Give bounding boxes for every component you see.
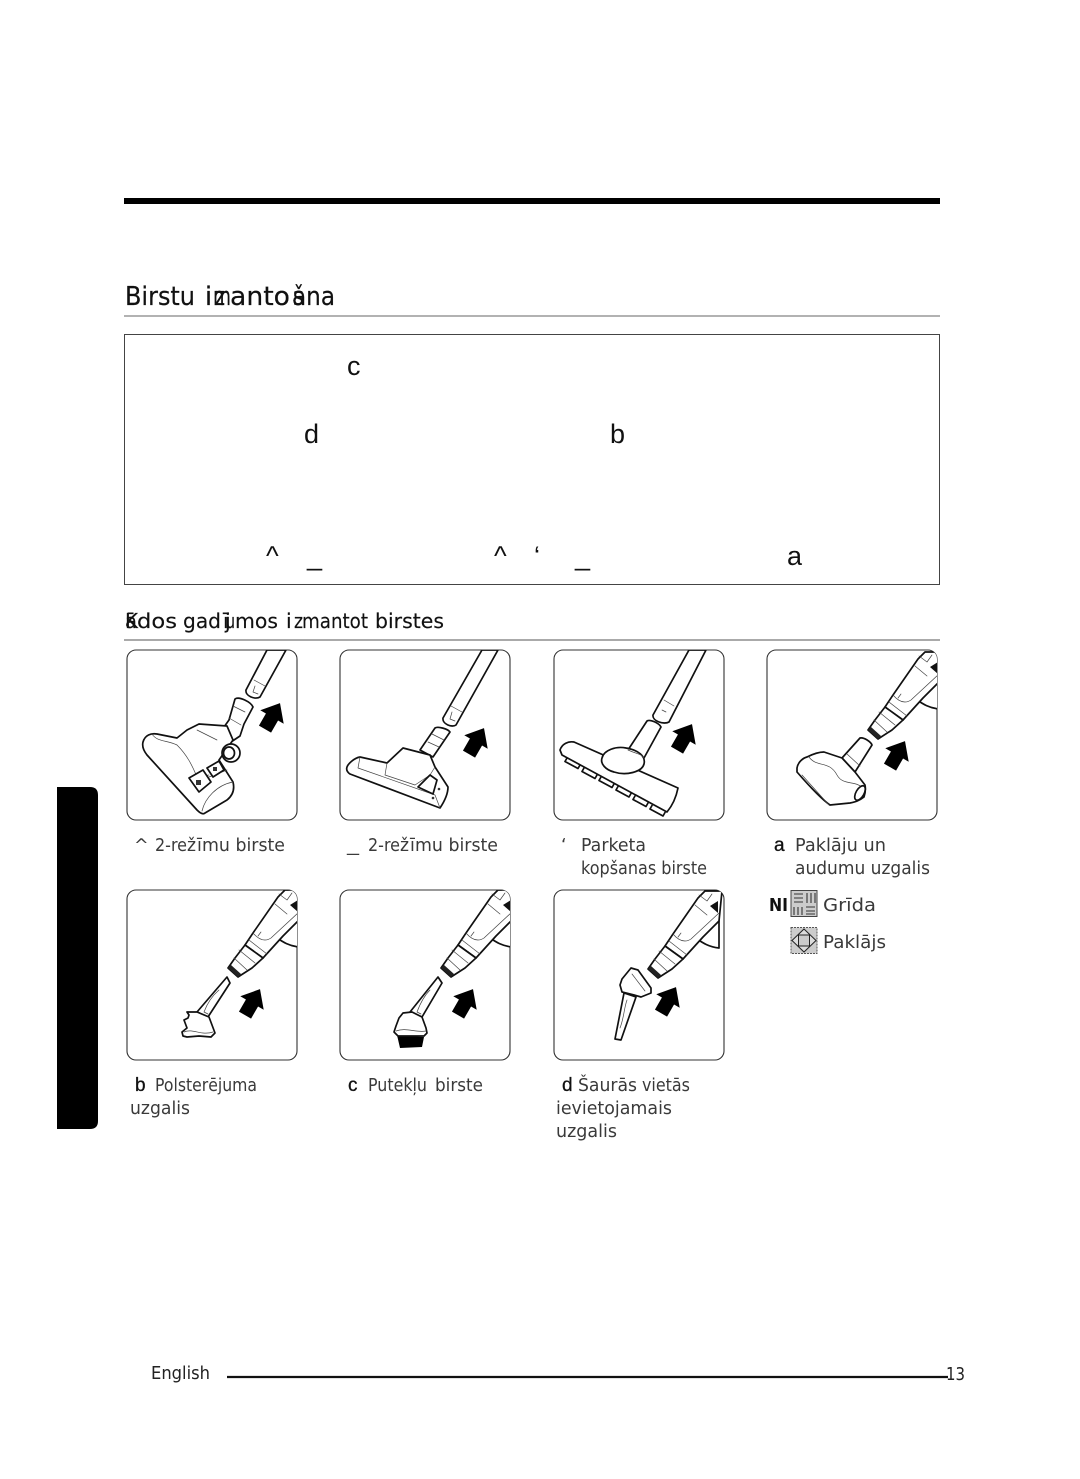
legend: carpet mode: Paklājs [823, 933, 886, 953]
caption: brush 1: mu birste [202, 836, 285, 856]
caption: carpet nozzle: a [774, 835, 785, 856]
panel: boxed note with stray glyphs: ‘ [534, 541, 540, 571]
caption: dusting brush: Putekļu [368, 1076, 427, 1096]
title: z [215, 282, 225, 312]
panel: boxed note with stray glyphs: b [610, 419, 625, 449]
caption: parquet brush [561, 836, 707, 879]
caption: brush 2: ī [409, 836, 415, 856]
panel: dusting brush [340, 890, 515, 1060]
caption: crevice nozzle: d [562, 1075, 573, 1096]
caption: carpet nozzle: audumu uzgalis [795, 859, 930, 879]
panel: boxed note with stray glyphs: c [347, 351, 360, 381]
title: š [293, 282, 304, 312]
icon: carpet [791, 928, 817, 954]
panel: boxed note with stray glyphs: a [787, 541, 803, 571]
caption: brush 1 [134, 836, 285, 856]
panel: crevice nozzle [554, 890, 724, 1060]
subheading: K [125, 609, 139, 633]
caption: crevice nozzle: Šaurās [578, 1074, 637, 1096]
subheading: dos [137, 609, 177, 633]
caption: crevice nozzle [556, 1074, 690, 1142]
panel: boxed note with stray glyphs: _ [306, 541, 323, 571]
caption: brush 2: 2-re [368, 836, 400, 856]
top rule [124, 198, 940, 204]
caption: carpet nozzle [774, 835, 930, 879]
panel: boxed note with stray glyphs: ^ [494, 541, 507, 571]
subheading: u [226, 609, 235, 633]
caption: brush 2 [346, 836, 498, 856]
legend: floor mode: NI [769, 895, 788, 916]
panel: upholstery nozzle [127, 890, 302, 1060]
subheading: ā [125, 609, 137, 633]
title: m [213, 282, 231, 312]
footer language: English [151, 1364, 210, 1384]
side tab [57, 787, 98, 1129]
caption: brush 2: ž [400, 836, 409, 856]
panel: boxed note with stray glyphs [124, 334, 940, 584]
title: i [205, 282, 212, 312]
panel: boxed note with stray glyphs: d [304, 419, 319, 449]
title: anto [230, 282, 290, 312]
caption: dusting brush: birste [435, 1076, 483, 1096]
legend: floor mode [769, 890, 876, 916]
caption: brush 1: 2-re [155, 836, 187, 856]
subheading: z [294, 609, 303, 633]
subheading: j [224, 609, 231, 633]
legend: floor mode: Grīda [823, 896, 876, 916]
caption: upholstery nozzle: b [135, 1075, 146, 1096]
caption: crevice nozzle: ievietojamais [556, 1099, 672, 1119]
caption: upholstery nozzle [130, 1075, 257, 1119]
caption: brush 2: mu birste [415, 836, 498, 856]
caption: upholstery nozzle: Polsterējuma [155, 1076, 257, 1096]
caption: brush 1: ī [196, 836, 202, 856]
panel: parquet brush [554, 650, 724, 820]
page number: 13 [946, 1365, 965, 1385]
caption: brush 2: _ [346, 836, 359, 856]
legend: carpet mode [791, 928, 886, 954]
caption: parquet brush: ‘ [561, 836, 567, 856]
panel: boxed note with stray glyphs: _ [574, 541, 591, 571]
caption: crevice nozzle: vietās [642, 1076, 690, 1096]
subheading: gad [183, 609, 221, 633]
caption: parquet brush: Parketa [581, 836, 646, 856]
caption: upholstery nozzle: uzgalis [130, 1099, 190, 1119]
panel: carpet and fabric nozzle [767, 650, 942, 820]
subheading: mos [235, 609, 278, 633]
caption: parquet brush: kopšanas birste [581, 859, 707, 879]
subheading: ī [222, 609, 229, 633]
title: Birstu [125, 282, 195, 312]
subheading: birstes [375, 609, 444, 633]
panel: brush 1 [127, 650, 297, 820]
caption: dusting brush [348, 1075, 483, 1096]
panel: boxed note with stray glyphs: ^ [266, 541, 279, 571]
panel: brush 2 [340, 650, 510, 820]
icon: hard floor [791, 890, 817, 916]
caption: crevice nozzle: uzgalis [556, 1122, 617, 1142]
caption: carpet nozzle: Paklāju un [795, 836, 886, 856]
caption: dusting brush: c [348, 1075, 358, 1096]
subheading: i [286, 609, 292, 633]
subheading: mantot [302, 609, 368, 633]
subheading [125, 609, 444, 633]
caption: brush 1: ^ [134, 836, 149, 856]
caption: brush 1: ž [187, 836, 196, 856]
title [125, 282, 335, 312]
title: ana [292, 282, 335, 312]
